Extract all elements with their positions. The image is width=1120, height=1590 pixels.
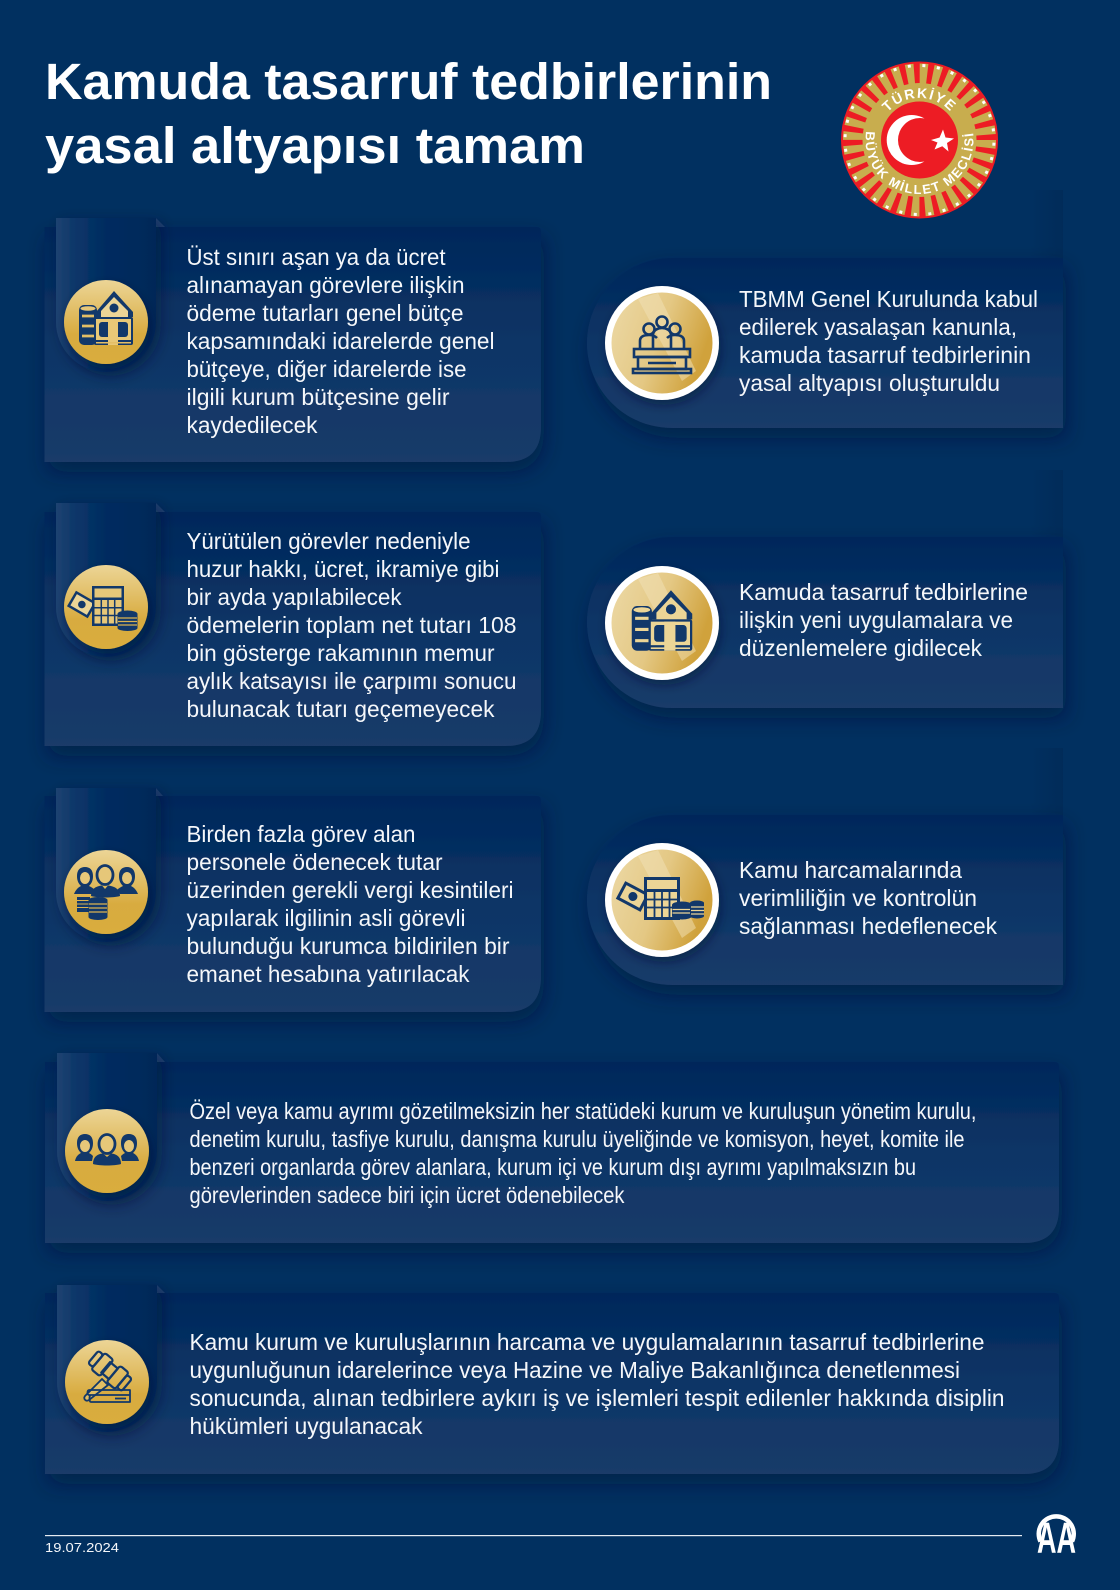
icon: house and money (605, 566, 719, 680)
text: sonucunda, alınan tedbirlere aykırı iş ve işlemleri tespit edilenler hakkında disiplin (190, 1385, 1004, 1411)
tab (56, 503, 165, 657)
icon: assembly (605, 286, 719, 400)
text: yapılarak ilgilinin asli görevli (186, 905, 466, 931)
text: ilişkin yeni uygulamalara ve (739, 607, 1013, 633)
tab (57, 1285, 165, 1432)
text: Kamuda tasarruf tedbirlerine (739, 579, 1028, 605)
text: Kamu kurum ve kuruluşlarının harcama ve uygulamalarının tasarruf tedbirlerine (190, 1329, 984, 1355)
panel: left 2 (44, 503, 541, 746)
text: TBMM Genel Kurulunda kabul (739, 286, 1038, 312)
icon: gavel and book (65, 1340, 149, 1424)
text: yasal altyapısı oluşturuldu (739, 370, 1000, 396)
text: hükümleri uygulanacak (190, 1413, 423, 1439)
date: 19.07.2024 (45, 1541, 119, 1555)
tab (56, 218, 165, 372)
tab (56, 788, 163, 942)
icon: calculator and coins (64, 565, 148, 649)
panel: right 2 (587, 470, 1063, 708)
text: Yürütülen görevler nedeniyle (186, 528, 470, 554)
text: ödeme tutarları genel bütçe (186, 300, 464, 326)
text: görevlerinden sadece biri için ücret ödenebilecek (190, 1182, 625, 1208)
emblem: TBMM seal: TÜRKİYE (881, 88, 956, 111)
panel: right 1 (587, 190, 1063, 428)
text (739, 286, 1038, 396)
tab (57, 1053, 165, 1201)
title: Kamuda tasarruf tedbirlerinin (45, 53, 772, 110)
panel: left 3 (44, 788, 541, 1012)
text: edilerek yasalaşan kanunla, (739, 314, 1017, 340)
text: ilgili kurum bütçesine gelir (186, 384, 450, 410)
text: verimliliğin ve kontrolün (739, 885, 977, 911)
panel: wide 2 (45, 1285, 1059, 1474)
text: bulunduğu kurumca bildirilen bir (186, 933, 510, 959)
text: benzeri organlarda görev alanlara, kurum içi ve kurum dışı ayrımı yapılmaksızın bu (190, 1154, 916, 1180)
icon: people and coins (64, 850, 148, 934)
title (45, 53, 772, 174)
text: üzerinden gerekli vergi kesintileri (186, 877, 514, 903)
text: aylık katsayısı ile çarpımı sonucu (186, 668, 516, 694)
text: alınamayan görevlere ilişkin (186, 272, 464, 298)
text: denetim kurulu, tasfiye kurulu, danışma kurulu üyeliğinde ve komisyon, heyet, komite ile (190, 1126, 964, 1152)
panel: left 1 (44, 218, 541, 462)
icon: calculator and coins (605, 843, 719, 957)
panel: wide 1 (45, 1053, 1059, 1243)
text (186, 528, 516, 722)
text: bir ayda yapılabilecek (186, 584, 402, 610)
footer rule (45, 1535, 1022, 1536)
icon: people (65, 1109, 149, 1193)
panel: right 3 (587, 748, 1063, 985)
text: uygunluğunun idarelerince veya Hazine ve Maliye Bakanlığınca denetlenmesi (190, 1357, 960, 1383)
text: düzenlemelere gidilecek (739, 635, 982, 661)
logo: AA (1037, 1514, 1076, 1563)
text: Kamu harcamalarında (739, 857, 963, 883)
text (190, 1329, 1004, 1439)
text (190, 1098, 976, 1208)
text: bin gösterge rakamının memur (186, 640, 495, 666)
text (186, 821, 514, 987)
text: Özel veya kamu ayrımı gözetilmeksizin her statüdeki kurum ve kuruluşun yönetim kurulu, (190, 1098, 976, 1124)
text: kaydedilecek (186, 412, 318, 438)
emblem: TBMM seal: BÜYÜK MİLLET MECLİSİ (866, 132, 974, 194)
text: Üst sınırı aşan ya da ücret (186, 244, 446, 270)
text: sağlanması hedeflenecek (739, 913, 997, 939)
text (739, 857, 997, 939)
text: personele ödenecek tutar (186, 849, 443, 875)
text: bütçeye, diğer idarelerde ise (186, 356, 466, 382)
text: ödemelerin toplam net tutarı 108 (186, 612, 516, 638)
text: Birden fazla görev alan (186, 821, 416, 847)
title: yasal altyapısı tamam (45, 117, 585, 174)
logo: AA: AA (1037, 1514, 1076, 1563)
icon: house and money (64, 280, 148, 364)
text (739, 579, 1028, 661)
text (186, 244, 494, 438)
text: huzur hakkı, ücret, ikramiye gibi (186, 556, 500, 582)
text: kapsamındaki idarelerde genel (186, 328, 494, 354)
text: emanet hesabına yatırılacak (186, 961, 470, 987)
emblem: TBMM seal (841, 62, 998, 218)
text: kamuda tasarruf tedbirlerinin (739, 342, 1031, 368)
text: bulunacak tutarı geçemeyecek (186, 696, 495, 722)
